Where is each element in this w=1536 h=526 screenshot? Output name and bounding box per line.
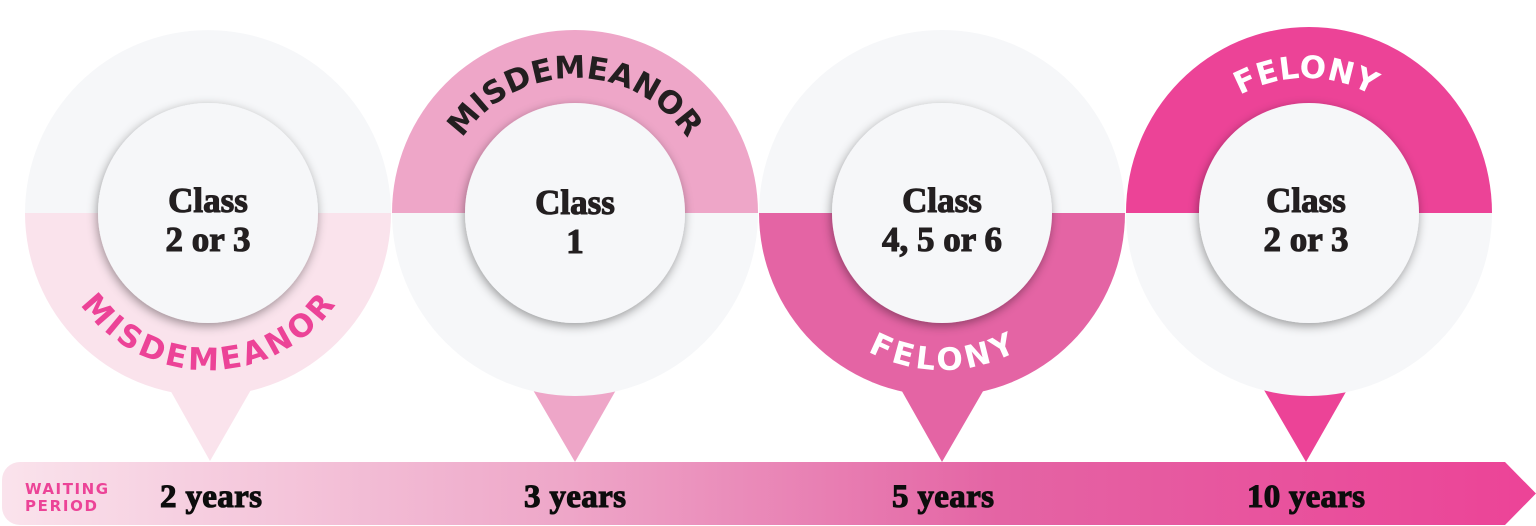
class label: 4, 5 or 6	[882, 220, 1002, 259]
misdemeanor arc label: MISDEMEANOR	[82, 292, 336, 370]
10 years: 10 years	[1247, 479, 1365, 515]
marker 4: class 2 or 3 felony	[1126, 27, 1492, 462]
pointer triangle	[533, 390, 616, 462]
inner circle	[465, 103, 685, 323]
lower half	[759, 213, 1125, 396]
lower half	[392, 213, 758, 396]
2 years: 2 years	[160, 479, 262, 515]
inner circle	[98, 103, 318, 323]
class label: Class	[902, 181, 982, 220]
marker 2: class 1 misdemeanor	[392, 30, 758, 462]
upper half	[1126, 27, 1492, 213]
pointer triangle	[1264, 390, 1347, 462]
felony arc label: FELONY	[870, 331, 1009, 370]
timeline arrow bar	[2, 462, 1536, 525]
upper half	[25, 30, 391, 213]
misdemeanor arc label: MISDEMEANOR	[446, 55, 701, 138]
marker 1: class 2 or 3 misdemeanor	[25, 30, 391, 460]
class label: Class	[535, 183, 615, 222]
inner circle	[1199, 103, 1419, 323]
inner circle	[832, 103, 1052, 323]
class label: Class	[168, 181, 248, 220]
3 years: 3 years	[524, 479, 626, 515]
class label: 2 or 3	[166, 220, 250, 259]
waiting period label: PERIOD	[25, 497, 97, 515]
felony arc label: FELONY	[1232, 55, 1382, 94]
class label: Class	[1266, 181, 1346, 220]
marker 3: class 4, 5 or 6 felony	[759, 30, 1125, 462]
upper half	[759, 30, 1125, 213]
upper half	[392, 30, 758, 213]
waiting period label	[25, 480, 108, 515]
5 years: 5 years	[892, 479, 994, 515]
waiting period label: WAITING	[25, 480, 108, 498]
pointer triangle	[899, 386, 986, 462]
pointer triangle	[169, 388, 252, 461]
class label: 2 or 3	[1264, 220, 1348, 259]
lower half	[1126, 213, 1492, 396]
class label: 1	[566, 222, 584, 261]
lower half	[25, 213, 391, 396]
